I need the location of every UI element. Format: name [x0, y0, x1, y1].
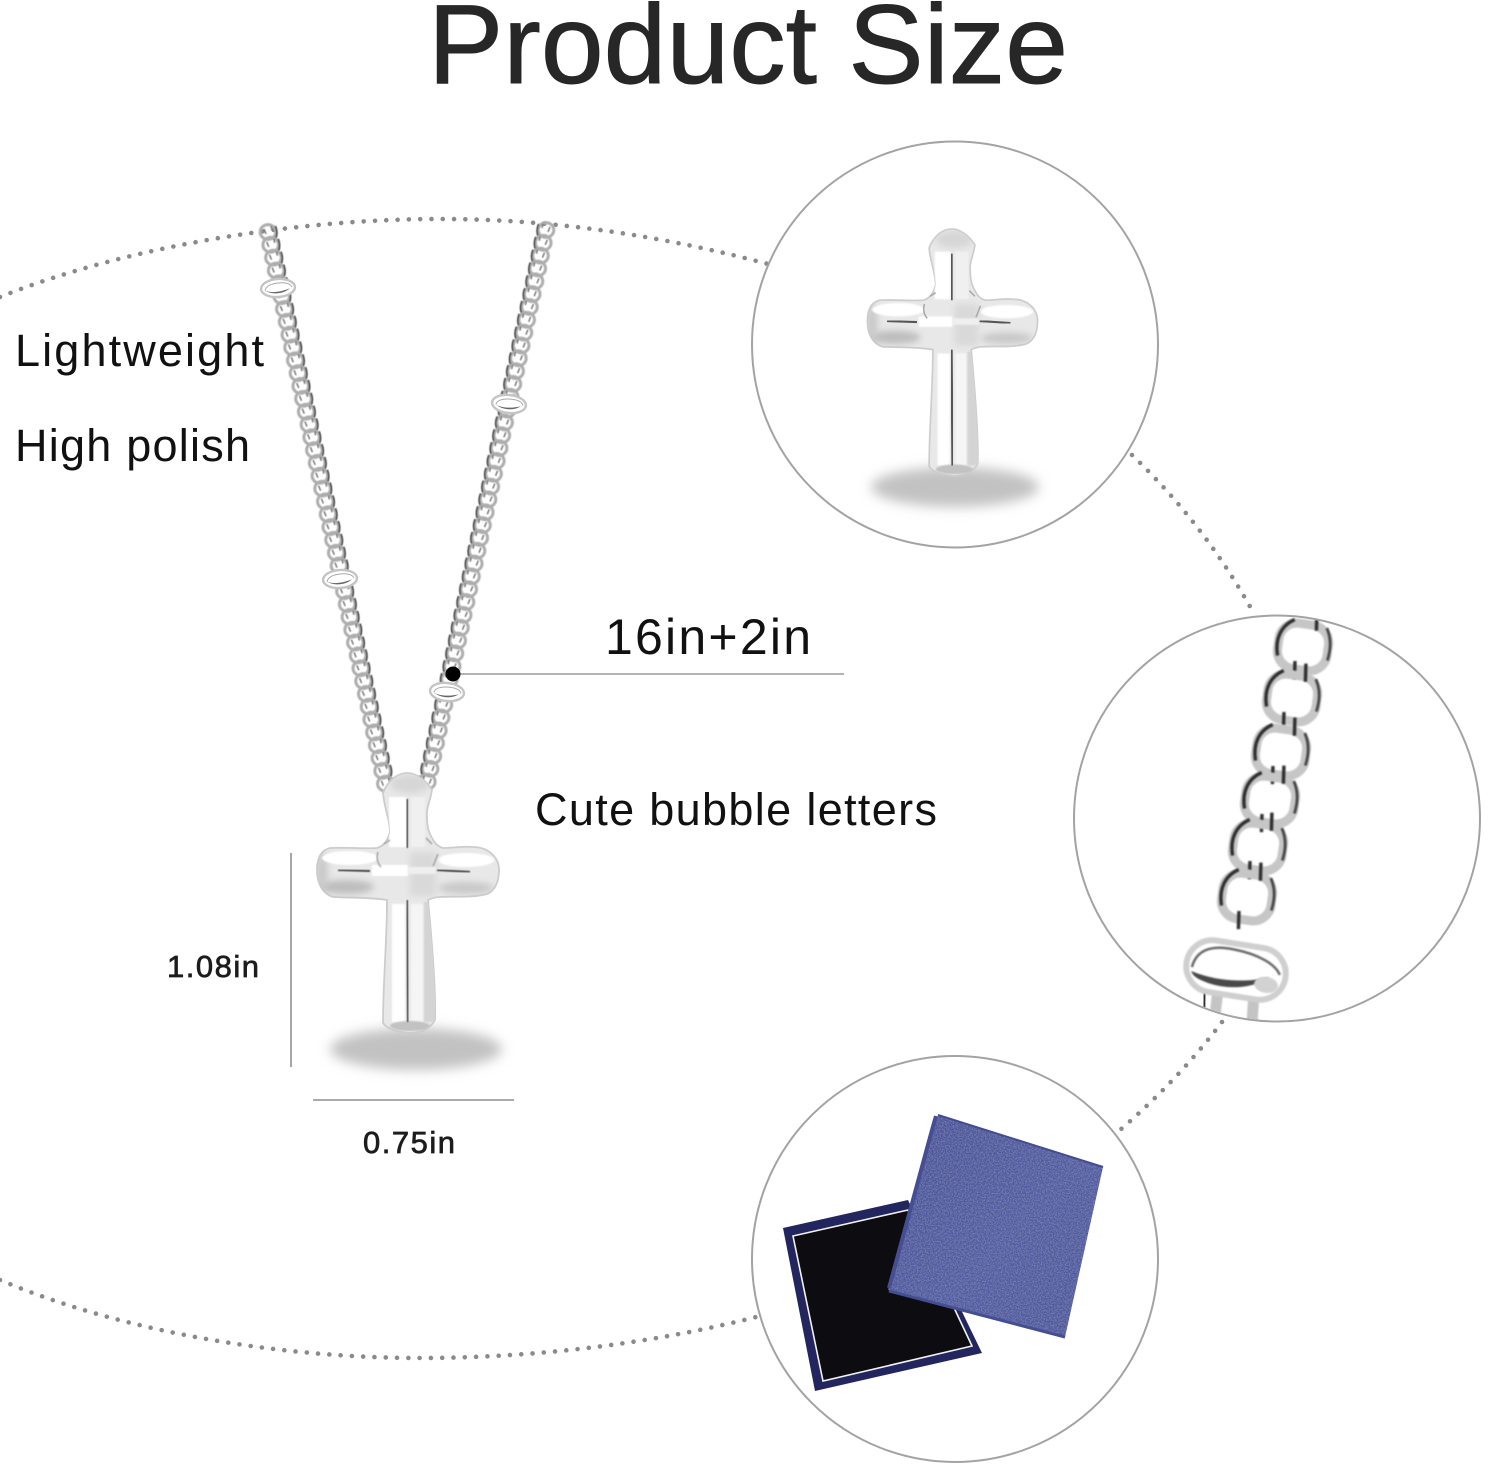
detail circle: gift box — [752, 1056, 1158, 1462]
dotted loop connecting the detail circles — [0, 219, 1253, 1358]
pendant shadow — [871, 467, 1039, 507]
necklace chain — [260, 223, 554, 791]
detail circle: pendant — [752, 142, 1158, 548]
box lid — [888, 1115, 1103, 1337]
large bead — [1183, 936, 1289, 1004]
feature label: lightweight: Lightweight — [15, 325, 264, 376]
chain close-up — [1183, 608, 1335, 1024]
chain length callout: 16in+2in — [605, 609, 811, 665]
main cross pendant — [316, 773, 499, 1033]
pendant close-up — [866, 229, 1038, 476]
chain beads — [260, 278, 527, 703]
box base — [783, 1200, 982, 1391]
feature label: high polish: High polish — [15, 420, 250, 471]
main cross shadow — [330, 1028, 502, 1070]
width dimension: 0.75in — [363, 1125, 455, 1160]
detail circle: chain links — [1074, 608, 1480, 1024]
chain length callout — [446, 609, 844, 682]
height dimension: 1.08in — [167, 949, 259, 984]
right chain strand — [418, 223, 554, 789]
feature label: cute bubble letters: Cute bubble letters — [535, 784, 937, 835]
left chain strand — [260, 225, 394, 791]
